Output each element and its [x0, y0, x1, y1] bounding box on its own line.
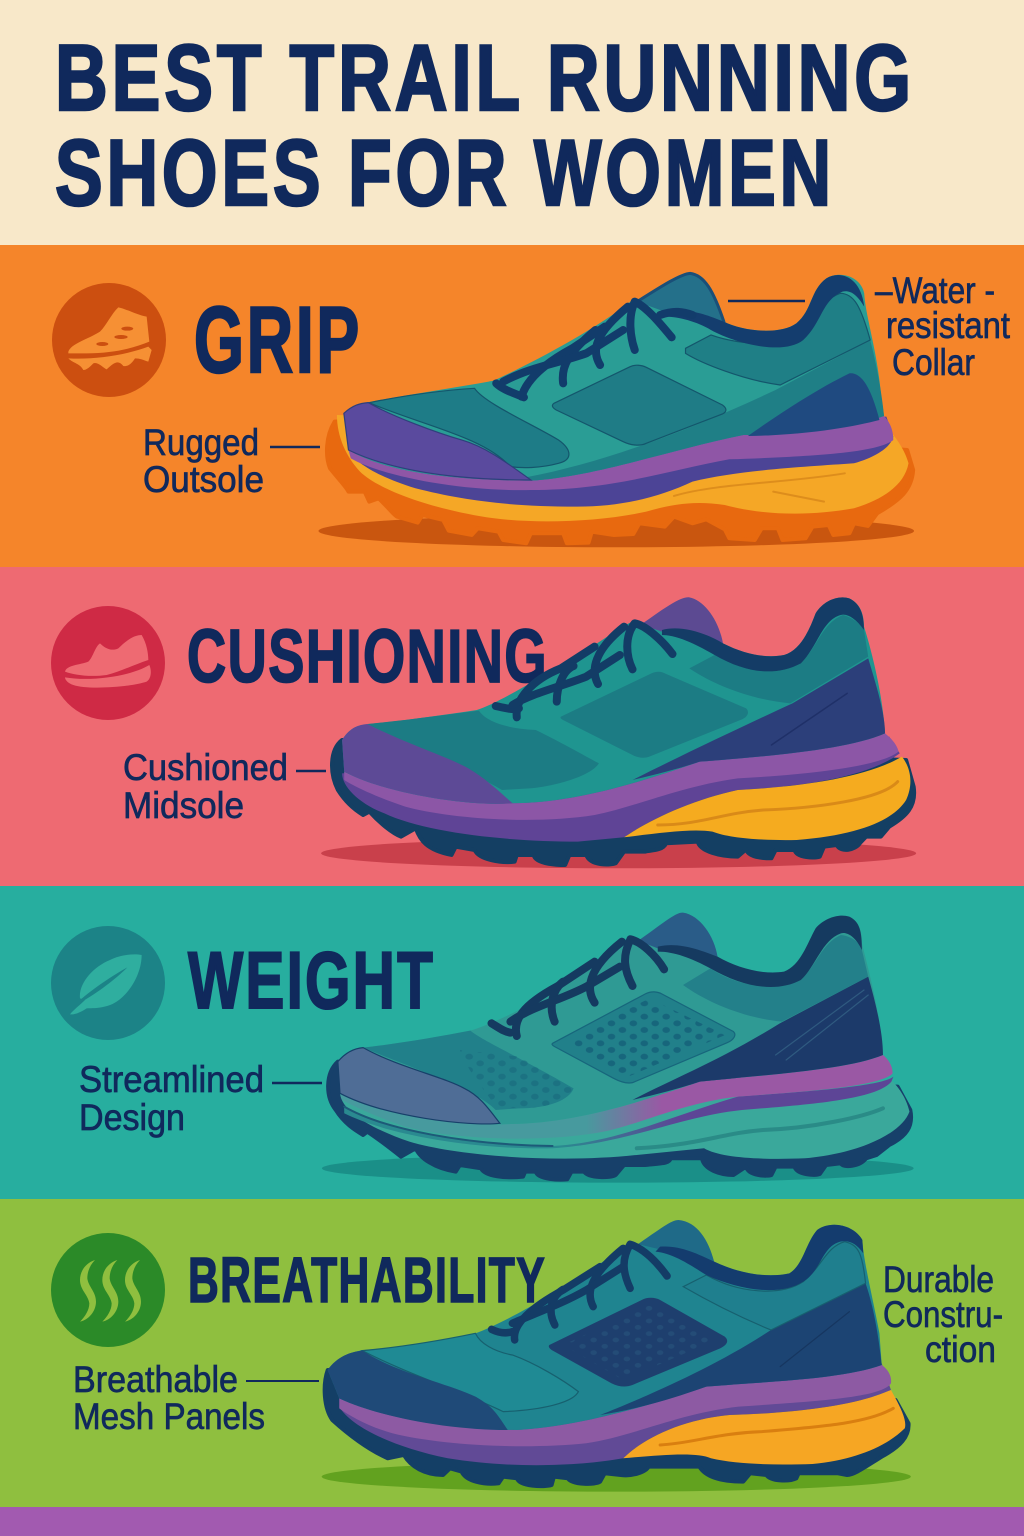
rugged outsole	[327, 417, 913, 543]
label: durable construction	[883, 1259, 1003, 1370]
footer band	[0, 1507, 1024, 1536]
upper	[342, 597, 885, 804]
ground shadow	[318, 515, 914, 547]
label: water-resistant collar: resistant	[886, 305, 1011, 346]
laces	[492, 1244, 667, 1340]
tongue	[614, 1220, 718, 1277]
side diamond panel	[552, 365, 726, 445]
label: durable construction: Constru-	[883, 1294, 1003, 1335]
label: streamlined design: Streamlined	[79, 1059, 264, 1100]
collar band	[656, 1225, 863, 1290]
lower purple band	[348, 417, 893, 507]
toe cap	[342, 724, 513, 804]
lower gradient band	[344, 1077, 893, 1148]
collar panel	[686, 293, 870, 385]
outsole	[332, 740, 914, 865]
navy heel panel	[748, 373, 879, 436]
yellow midsole	[337, 415, 909, 521]
shoe illustration: grip	[318, 273, 914, 547]
upper gradient band	[340, 1055, 893, 1139]
yellow midsole	[623, 1390, 905, 1464]
panel: breathability background	[0, 1199, 1024, 1507]
label: water-resistant collar: –Water -	[875, 270, 995, 311]
heading: cushioning: CUSHIONING	[187, 614, 548, 698]
teal midsole	[340, 1080, 909, 1159]
collar band	[665, 275, 864, 347]
label: durable construction: Durable	[883, 1259, 994, 1300]
outsole	[328, 1062, 911, 1180]
collar panel	[683, 1242, 866, 1330]
icon: cushioning shoe	[51, 606, 165, 720]
label: cushioned midsole: Cushioned	[123, 747, 288, 788]
toe cap	[344, 403, 531, 480]
toe panel	[362, 1333, 578, 1412]
purple band	[344, 733, 899, 820]
label: rugged outsole	[143, 422, 320, 500]
title	[55, 25, 915, 225]
purple band	[348, 416, 893, 490]
upper	[338, 916, 883, 1124]
collar panel	[689, 615, 868, 703]
ground shadow	[321, 838, 916, 868]
panel: grip background	[0, 245, 1024, 567]
perforated toe panel	[363, 1031, 574, 1110]
laces	[496, 302, 692, 397]
label: breathable mesh panels: Breathable	[73, 1359, 238, 1400]
label: water-resistant collar: Collar	[892, 342, 975, 383]
side diamond panel	[560, 672, 748, 758]
label: streamlined design	[79, 1059, 322, 1138]
collar band	[658, 916, 862, 987]
outsole	[325, 1370, 909, 1486]
toe cap	[328, 1351, 508, 1430]
tongue	[619, 273, 725, 333]
panel: weight background	[0, 886, 1024, 1199]
yellow midsole	[624, 757, 910, 840]
laces	[492, 939, 664, 1036]
lower purple band	[339, 1363, 891, 1465]
collar panel	[683, 935, 868, 1022]
label: rugged outsole: Rugged	[143, 422, 259, 463]
icon: breathability vapor	[51, 1233, 165, 1347]
label: breathable mesh panels: Mesh Panels	[73, 1396, 265, 1437]
upper	[344, 275, 884, 481]
label: breathable mesh panels	[73, 1359, 319, 1437]
tongue	[624, 597, 725, 657]
ground shadow	[322, 1154, 914, 1183]
label: streamlined design: Design	[79, 1097, 185, 1138]
toe panel	[367, 711, 599, 790]
lower purple band	[342, 737, 900, 842]
dark teal wedge	[526, 340, 884, 481]
label: rugged outsole: Outsole	[143, 459, 264, 500]
shoe illustration: cushioning	[321, 597, 916, 868]
toe panel	[369, 388, 569, 468]
shoe illustration: breathability	[322, 1220, 911, 1492]
perforated side diamond	[552, 992, 735, 1083]
icon: weight leaf	[51, 926, 165, 1040]
heading: weight: WEIGHT	[188, 936, 435, 1026]
ground shadow	[322, 1462, 911, 1492]
tongue	[620, 913, 721, 973]
label: cushioned midsole: Midsole	[123, 785, 244, 826]
navy heel panel	[633, 977, 883, 1100]
navy heel panel	[600, 1283, 882, 1415]
laces	[496, 623, 672, 717]
icon: grip shoe	[52, 283, 166, 397]
mesh side diamond	[549, 1298, 727, 1387]
heading: breathability: BREATHABILITY	[188, 1244, 546, 1316]
heading: grip: GRIP	[194, 287, 362, 392]
shoe illustration: weight	[322, 913, 914, 1183]
upper	[328, 1225, 882, 1430]
label: cushioned midsole	[123, 747, 326, 826]
toe cap	[338, 1048, 500, 1124]
label: water-resistant collar	[728, 270, 1011, 383]
collar band	[662, 597, 864, 671]
panel: title background	[0, 0, 1024, 245]
panel: cushioning background	[0, 567, 1024, 886]
label: durable construction: ction	[925, 1329, 996, 1370]
purple band	[339, 1365, 891, 1446]
navy rear panel	[633, 658, 885, 780]
